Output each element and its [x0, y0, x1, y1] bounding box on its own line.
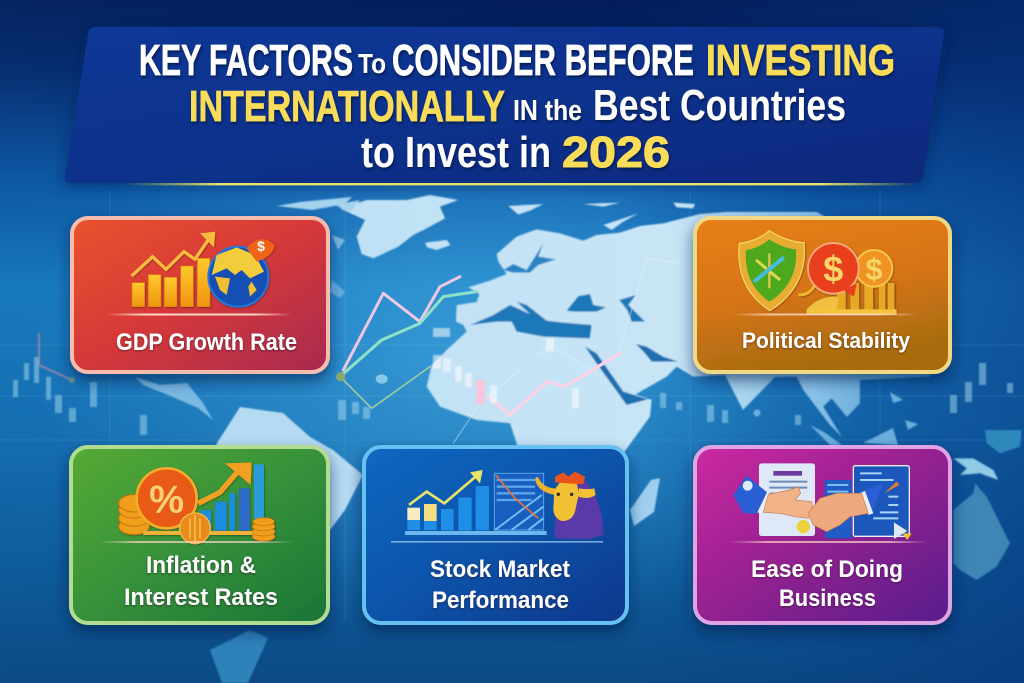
title text: 2026	[562, 128, 670, 177]
title text: KEY FACTORS	[139, 36, 353, 85]
map: Mediterranean sea	[470, 302, 592, 338]
icon: percent coin and bars: %	[149, 477, 184, 521]
title text: to Invest in	[361, 128, 551, 177]
label line two: Interest Rates	[124, 584, 278, 611]
chart overlay lines	[336, 258, 680, 443]
divider	[391, 541, 603, 543]
panel: Inflation & Interest Rates	[71, 447, 328, 623]
icon: shield and coins	[739, 231, 897, 315]
banner underline	[125, 183, 915, 185]
map: Australia and New Guinea	[953, 430, 1022, 580]
card background	[72, 218, 328, 372]
card background	[695, 218, 950, 372]
chart line: green trend	[340, 292, 477, 377]
card background	[71, 447, 328, 623]
chart line: rose trend over Africa	[488, 353, 620, 415]
map: Baltic sea	[503, 243, 556, 273]
divider	[732, 314, 918, 316]
card background	[695, 447, 950, 623]
title text: Best Countries	[593, 81, 846, 130]
label: Ease of Doing	[751, 556, 903, 583]
icon: stock bars and bull	[405, 470, 603, 539]
title text: IN the	[513, 95, 582, 127]
map: Black sea	[567, 294, 606, 312]
label line two: Performance	[432, 587, 569, 614]
title text	[139, 36, 895, 177]
map: North America fragments	[277, 197, 360, 298]
title banner	[65, 27, 944, 185]
divider	[98, 541, 294, 543]
map: South America	[180, 407, 363, 560]
divider	[730, 541, 928, 543]
label line two: Business	[779, 585, 876, 612]
icon: shield and coins: $	[865, 252, 883, 286]
label: Inflation &	[146, 552, 256, 579]
map: Greenland and Iceland	[340, 195, 695, 258]
panel: Ease of Doing Business	[695, 447, 950, 623]
world map	[135, 195, 1022, 683]
map: Red sea	[585, 347, 648, 405]
divider	[106, 314, 292, 316]
icon: shield and coins: $	[823, 249, 843, 290]
map: Caspian sea	[619, 295, 645, 322]
panel: Political Stability	[695, 218, 950, 372]
candlesticks over Africa	[433, 328, 579, 408]
title text: INVESTING	[706, 36, 895, 85]
left chart line	[39, 333, 75, 383]
title text: INTERNATIONALLY	[189, 82, 505, 131]
candlesticks	[13, 357, 1013, 435]
icon: percent coin and bars	[119, 462, 275, 544]
chart line: olive trend	[340, 367, 430, 408]
panel: GDP Growth Rate	[72, 218, 328, 372]
label: Political Stability	[742, 328, 911, 353]
title text: To	[358, 48, 386, 79]
chart line: faint white trend	[453, 258, 680, 443]
map: south-east Asia islands	[754, 392, 918, 445]
banner panel	[65, 27, 944, 183]
panel: Stock Market Performance	[364, 447, 627, 623]
icon: bars and globe	[132, 232, 275, 307]
icon: bars and globe: $	[257, 238, 265, 254]
title text: CONSIDER BEFORE	[392, 36, 694, 85]
map: Central America	[135, 377, 213, 420]
chart line: pink trend	[343, 277, 460, 370]
map: South America tail	[210, 630, 268, 683]
map: Eurasia and Africa	[427, 212, 930, 523]
map: Persian gulf	[636, 344, 678, 362]
label: Stock Market	[430, 556, 570, 583]
candlestick: pink	[476, 380, 485, 404]
label: GDP Growth Rate	[116, 329, 297, 356]
icon: handshake and documents	[733, 463, 912, 540]
map: Madagascar	[630, 478, 660, 526]
card background	[364, 447, 627, 623]
